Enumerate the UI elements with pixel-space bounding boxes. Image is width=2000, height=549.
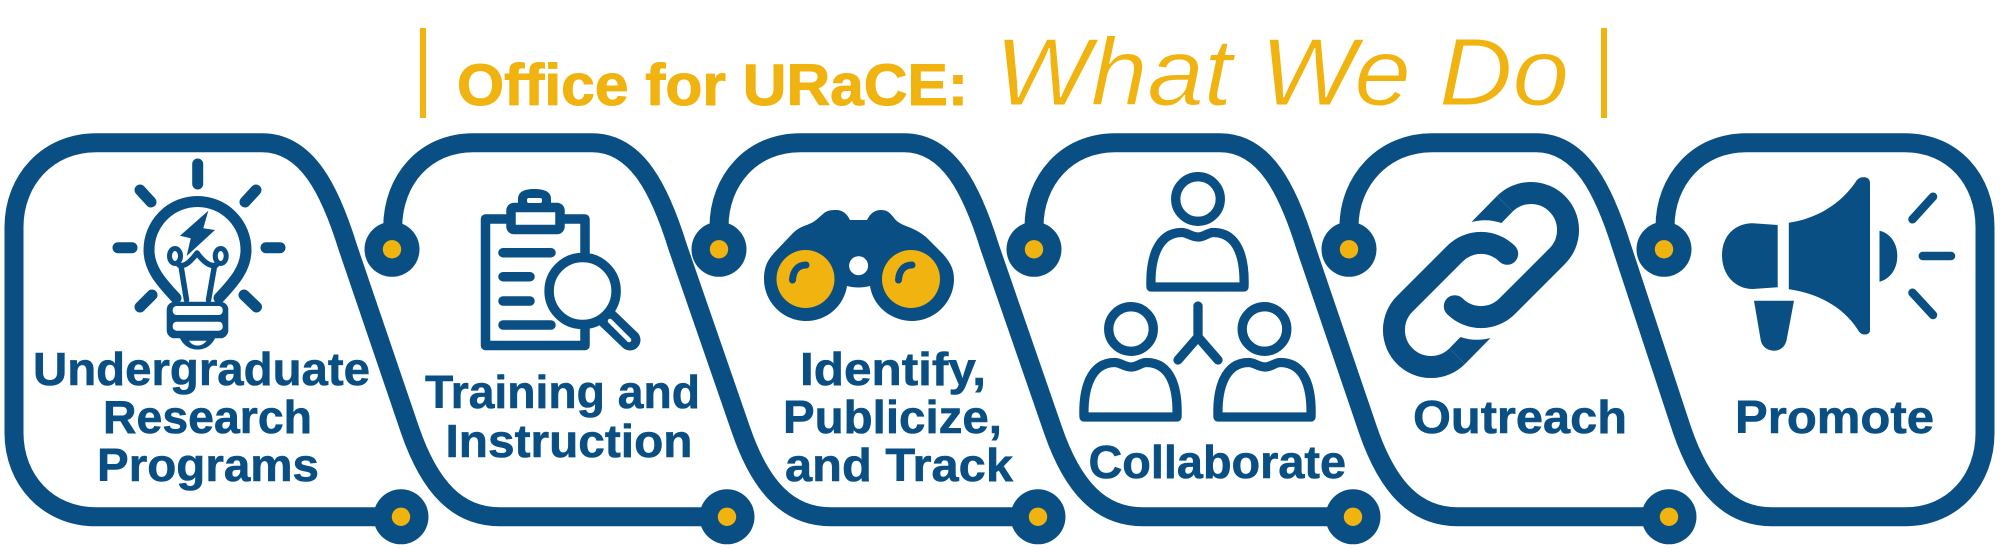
connector dots (364, 222, 1696, 544)
panel: Identify, Publicize, and Track (719, 143, 1353, 517)
label (425, 366, 700, 467)
label: Collaborate (1088, 436, 1346, 488)
label: Identify, (800, 343, 986, 395)
panel: Outreach (1349, 143, 1905, 517)
label (783, 343, 1013, 491)
label: Programs (97, 439, 319, 491)
label: Undergraduate (33, 343, 370, 395)
right title bar (1601, 28, 1607, 118)
panel outline (14, 143, 727, 517)
panel outline (719, 143, 1353, 517)
label: Training and (425, 366, 700, 418)
icon: three connected people (1084, 177, 1311, 417)
title bold part: Office for URaCE: (457, 53, 968, 118)
panel: Training and Instruction (393, 143, 1038, 517)
label: and Track (785, 439, 1013, 491)
icon: clipboard with magnifier (486, 189, 630, 346)
label: Instruction (446, 415, 692, 467)
icon: binoculars (764, 210, 954, 321)
label: Outreach (1413, 391, 1627, 443)
panel: Undergraduate Research Programs (14, 143, 727, 517)
panel: Collaborate (1034, 143, 1669, 517)
panel outline (393, 143, 1038, 517)
label (33, 343, 370, 491)
panel outline (1034, 143, 1669, 517)
panel outline (1349, 143, 1905, 517)
left title bar (420, 28, 426, 118)
label: Publicize, (783, 391, 1002, 443)
label: Promote (1735, 391, 1934, 443)
label: Research (103, 391, 312, 443)
icon: megaphone (1722, 177, 1951, 351)
title (420, 20, 1607, 126)
panel: Promote (1665, 143, 1985, 517)
icon: light bulb (118, 164, 280, 350)
title light italic part: What We Do (995, 20, 1569, 126)
panel outline (1665, 143, 1985, 517)
icon: chain links (1394, 193, 1568, 367)
